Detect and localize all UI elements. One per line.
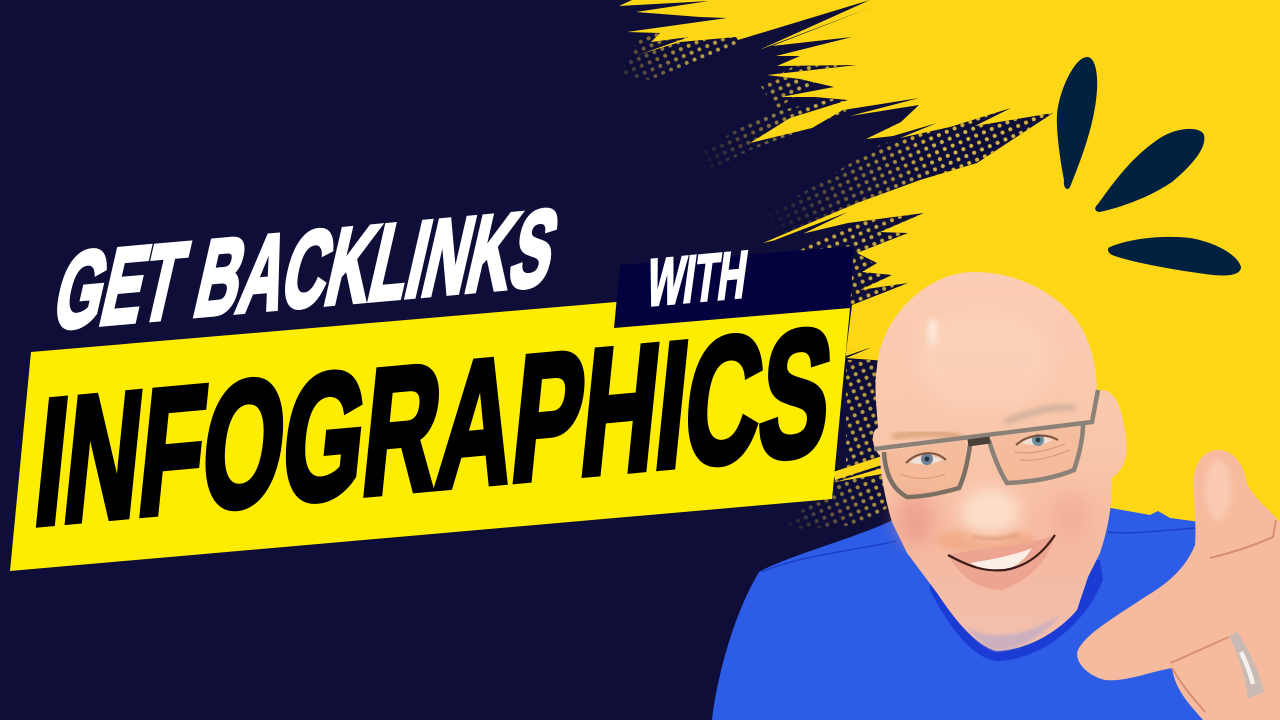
head (873, 272, 1127, 651)
glasses (874, 390, 1098, 497)
mouth (948, 535, 1055, 590)
navy streak in yellow wedge (775, 212, 848, 240)
heading: get backlinks: GET BACKLINKS (44, 188, 568, 353)
nose (960, 487, 1020, 539)
lens tint (884, 425, 1083, 497)
yellow streak beside banner (833, 347, 885, 482)
eyes (900, 434, 1070, 478)
ring (1229, 632, 1264, 698)
halftone dots (620, 25, 1060, 530)
cheeks (895, 494, 935, 546)
forehead highlight (928, 319, 938, 347)
person (712, 272, 1280, 720)
banner: yellow (10, 302, 850, 571)
moustache area (935, 528, 1035, 552)
tag label: with: WITH (643, 237, 752, 321)
neck tint (965, 615, 1060, 651)
hand (1077, 450, 1280, 720)
brows (893, 433, 962, 438)
tag: with box (614, 237, 854, 328)
icon: three burst petals (1057, 57, 1241, 276)
shirt (712, 508, 1215, 720)
